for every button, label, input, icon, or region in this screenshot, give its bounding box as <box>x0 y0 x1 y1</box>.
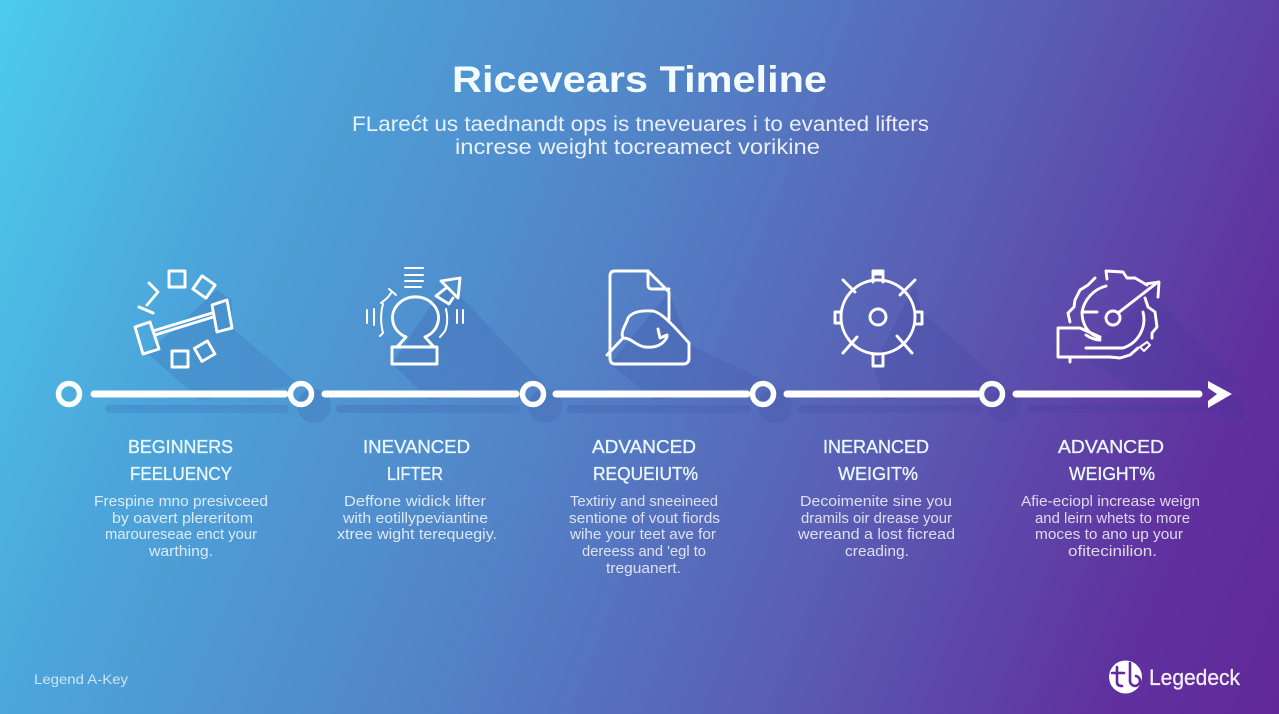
legend key: Legend A-Key <box>34 672 128 687</box>
description: dramils oir drease your <box>801 511 952 527</box>
heading: REQUEIUT% <box>593 463 698 484</box>
icon: gear target <box>835 271 922 366</box>
heading: WEIGIT% <box>838 463 918 484</box>
description: ofitecinilion. <box>1068 544 1157 560</box>
step 3 text <box>569 436 720 577</box>
description: with eotillypeviantine <box>342 511 488 527</box>
subtitle <box>352 113 929 159</box>
heading: INERANCED <box>823 436 929 457</box>
description: wereand a lost ficread <box>797 527 955 543</box>
description: sentione of vout fiords <box>569 511 720 527</box>
heading <box>128 436 233 484</box>
description: Decoimenite sine you <box>800 494 952 510</box>
heading <box>823 436 929 484</box>
description: Afie-eciopl increase weign <box>1021 494 1200 510</box>
description: by oavert plereritom <box>112 511 253 527</box>
description <box>337 494 497 543</box>
icon: lifter with arrow <box>367 268 463 364</box>
description: Deffone widick lifter <box>344 494 486 510</box>
heading: LIFTER <box>387 463 443 484</box>
step 2 text <box>337 436 497 543</box>
logo wordmark: Legedeck <box>1149 665 1241 690</box>
step 4 text <box>797 436 955 560</box>
heading: ADVANCED <box>1058 436 1164 457</box>
description: creading. <box>845 544 909 560</box>
description <box>569 494 720 577</box>
heading: ADVANCED <box>592 436 696 457</box>
description: warthing. <box>148 544 213 560</box>
description <box>94 494 268 560</box>
description: Frespine mno presivceed <box>94 494 268 510</box>
subtitle: increse weight tocreamect vorikine <box>455 136 820 159</box>
description <box>1021 494 1200 560</box>
title: Ricevears Timeline <box>452 59 827 100</box>
timeline segments <box>94 390 1199 398</box>
timeline <box>58 381 1232 408</box>
heading: FEELUENCY <box>130 463 232 484</box>
heading <box>592 436 698 484</box>
heading <box>363 436 470 484</box>
logo <box>1109 660 1241 694</box>
description: Textiriy and sneeineed <box>570 494 718 510</box>
heading: BEGINNERS <box>128 436 233 457</box>
heading: WEIGHT% <box>1069 463 1155 484</box>
description: dereess and 'egl to <box>582 544 706 560</box>
step 1 text <box>94 436 268 560</box>
arrowhead <box>1208 381 1232 408</box>
icon: barbell <box>135 271 232 367</box>
icon: logo mark <box>1109 660 1142 694</box>
icon: gauge gear <box>1058 271 1159 362</box>
description <box>797 494 955 560</box>
heading <box>1058 436 1164 484</box>
timeline nodes <box>58 384 1002 404</box>
icon: document with mound <box>607 271 689 364</box>
step 5 text <box>1021 436 1200 560</box>
description: wihe your teet ave for <box>569 527 716 543</box>
description: maroureseae enct your <box>105 527 257 543</box>
subtitle: FLarećt us taednandt ops is tneveuares i to evanted lifters <box>352 113 929 136</box>
description: and leirn whets to more <box>1035 511 1190 527</box>
heading: INEVANCED <box>363 436 470 457</box>
description: moces to ano up your <box>1035 527 1183 543</box>
description: xtree wight terequegiy. <box>337 527 497 543</box>
description: treguanert. <box>606 561 681 577</box>
